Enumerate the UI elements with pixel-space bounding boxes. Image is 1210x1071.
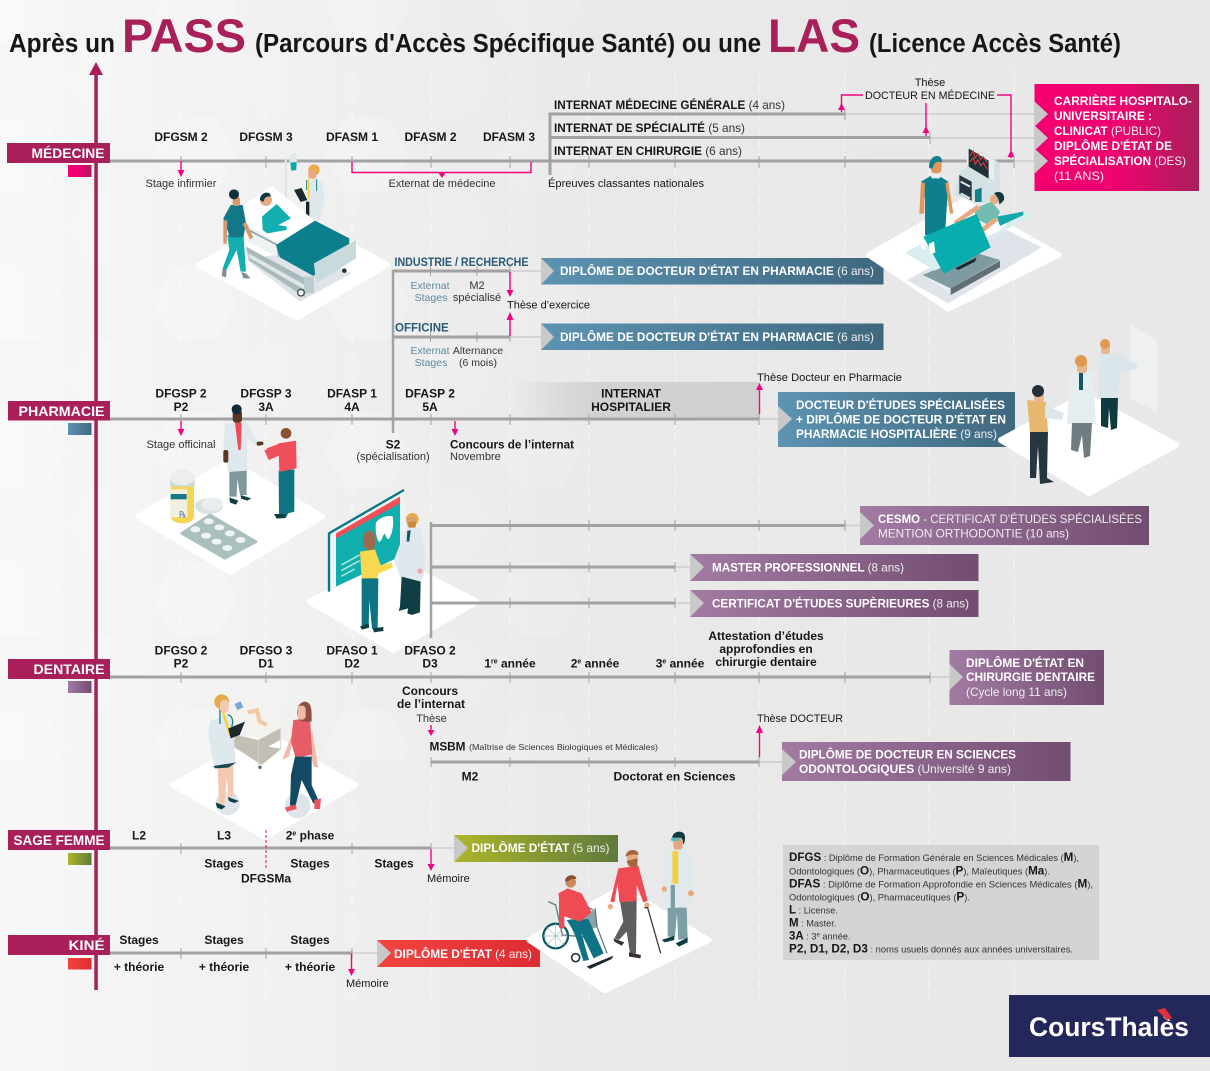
year labels: dentaire [155, 644, 705, 670]
phase labels: phase [296, 828, 335, 842]
diploma: master professionnel [690, 554, 978, 581]
dentaire timeline [110, 520, 951, 767]
msbm: (Maîtrise de Sciences Biologiques et Médicales) [469, 742, 658, 752]
year labels: pharmacie: 3A [258, 400, 274, 414]
diploma: carrière hospitalo-universitaire: CLINICAT (PUBLIC) [1054, 124, 1161, 138]
diploma: pharmacie officine: DIPLÔME DE DOCTEUR D'ÉTAT EN PHARMACIE (6 ans) [560, 329, 874, 344]
glossary panel: Odontologiques (O), Pharmaceutiques (P). [789, 892, 970, 904]
phase labels: e [292, 830, 296, 838]
tag: kiné: KINÉ [68, 937, 104, 953]
year labels: dentaire: e [662, 658, 666, 666]
diploma: docteur en sciences odontologiques: DIPLÔME DE DOCTEUR EN SCIENCES [799, 746, 1016, 762]
diploma: chirurgie dentaire: CHIRURGIE DENTAIRE [966, 670, 1095, 684]
diploma: certificat d'études supérieures: CERTIFICAT D'ÉTUDES SUPÈRIEURES (8 ans) [712, 596, 969, 610]
glossary panel: M : Master. [789, 918, 836, 930]
phase labels [132, 828, 414, 886]
section: sage-femme [8, 828, 618, 886]
year labels: dentaire: DFGSO 3 [240, 644, 293, 658]
stage officinal: Stage officinal [147, 439, 215, 451]
s2 spécialisation [356, 438, 430, 463]
officine branch: (6 mois) [459, 357, 497, 369]
diploma: carrière hospitalo-universitaire: SPÉCIALISATION (DES) [1054, 153, 1186, 168]
stages labels: Stages [290, 933, 330, 947]
stages labels: Stages [119, 933, 159, 947]
industrie / recherche branch: spécialisé [453, 292, 501, 304]
year labels: dentaire: P2 [174, 656, 189, 670]
glossary panel: Odontologiques (O), Pharmaceutiques (P), Maïeutiques (Ma). [789, 866, 1050, 878]
title: Après un [9, 30, 115, 58]
year labels: pharmacie: HOSPITALIER [591, 400, 671, 414]
title: LAS [768, 9, 860, 62]
diploma: pharmacie industrie [541, 258, 884, 284]
industrie / recherche branch: INDUSTRIE / RECHERCHE [394, 257, 529, 269]
mémoire kiné [346, 954, 389, 990]
year labels: dentaire: e [577, 658, 581, 666]
mémoire sage-femme [427, 849, 470, 885]
stages labels [114, 933, 335, 974]
diploma: pharmacie industrie: DIPLÔME DE DOCTEUR D'ÉTAT EN PHARMACIE (6 ans) [560, 263, 874, 278]
section: médecine [7, 77, 1199, 191]
concours de l'internat: Novembre [450, 451, 501, 463]
tag: pharmacie [8, 401, 110, 435]
phase labels: 2 [286, 828, 292, 842]
year labels: pharmacie: DFGSP 2 [155, 386, 207, 400]
diploma: kiné [377, 940, 540, 967]
officine branch [395, 322, 503, 369]
diploma: pharmacie hospitalière: + DIPLÔME DE DOCTEUR D'ÉTAT EN [796, 412, 1006, 426]
concours de l'internat dentaire: Thèse [416, 713, 447, 725]
officine branch: Stages [415, 357, 447, 369]
year labels: dentaire: D2 [344, 656, 360, 670]
year labels: dentaire: année [666, 656, 705, 670]
illustration: midwife [173, 694, 356, 837]
tag: sage femme [8, 830, 110, 865]
diploma: pharmacie hospitalière: DOCTEUR D'ÉTUDES SPÉCIALISÉES [796, 397, 1005, 412]
diploma: carrière hospitalo-universitaire: (11 ANS) [1054, 169, 1104, 183]
title [9, 9, 1121, 62]
attestation [708, 629, 824, 669]
section: kiné [8, 933, 540, 990]
year labels: pharmacie: DFASP 2 [405, 386, 455, 400]
s2 spécialisation: (spécialisation) [356, 451, 430, 463]
year labels: pharmacie: P2 [174, 400, 189, 414]
diploma: carrière hospitalo-universitaire: UNIVERSITAIRE : [1054, 109, 1152, 123]
diploma: certificat d'études supérieures [690, 590, 978, 617]
year labels: médecine: DFASM 1 [326, 130, 378, 144]
glossary panel [783, 845, 1099, 960]
phase labels: DFGSMa [241, 872, 291, 886]
year labels: dentaire: 1 [484, 656, 491, 670]
concours de l'internat dentaire: Concours [402, 684, 458, 698]
year labels: pharmacie [155, 386, 671, 414]
diploma: carrière hospitalo-universitaire: CARRIÈRE HOSPITALO- [1054, 93, 1192, 108]
thèse d'exercice [506, 300, 590, 336]
tag: médecine: MÉDECINE [32, 145, 104, 161]
médecine timeline [110, 109, 1036, 175]
illustration: operating room [869, 143, 1059, 309]
title: (Licence Accès Santé) [869, 30, 1121, 58]
logo: cours thalès [1009, 995, 1210, 1057]
diploma: pharmacie hospitalière: PHARMACIE HOSPITALIÈRE (9 ans) [796, 426, 997, 441]
glossary panel: 3A : 3 [789, 930, 816, 942]
tag: dentaire [8, 659, 110, 693]
phase labels: Stages [290, 856, 330, 870]
kiné timeline [110, 948, 378, 959]
diploma: carrière hospitalo-universitaire [1034, 84, 1199, 191]
stage infirmier [146, 161, 217, 190]
thèse docteur [756, 713, 843, 757]
glossary panel: e [816, 932, 820, 938]
officine branch: Alternance [453, 345, 503, 357]
stage officinal [147, 421, 215, 451]
year labels: pharmacie: DFASP 1 [327, 386, 377, 400]
concours de l'internat dentaire [397, 684, 465, 736]
year labels: dentaire: DFASO 1 [326, 644, 378, 658]
sage-femme timeline [110, 830, 455, 870]
internat labels [554, 97, 785, 158]
internat labels: INTERNAT MÉDECINE GÉNÉRALE (4 ans) [554, 97, 785, 112]
concours de l'internat dentaire: de l’internat [397, 697, 465, 711]
illustration: hospital room [199, 153, 387, 318]
externat de médecine [352, 162, 531, 190]
year labels: dentaire: DFASO 2 [404, 644, 456, 658]
section: pharmacie [8, 257, 1015, 463]
diploma: cesmo: CESMO - CERTIFICAT D'ÉTUDES SPÉCIALISÉES [878, 511, 1142, 526]
year labels: dentaire: 2 [571, 656, 577, 670]
axis arrow [89, 62, 103, 990]
thèse docteur en pharmacie: Thèse Docteur en Pharmacie [757, 372, 902, 384]
glossary panel: DFGS : Diplôme de Formation Générale en Sciences Médicales (M), [789, 852, 1079, 864]
attestation: approfondies en [719, 642, 813, 656]
year labels: dentaire: D1 [258, 656, 274, 670]
msbm [430, 740, 736, 784]
year labels: dentaire: DFGSO 2 [155, 644, 208, 658]
title: PASS [122, 9, 246, 62]
phase labels: L3 [217, 828, 231, 842]
diploma: docteur en sciences odontologiques [782, 742, 1070, 781]
year labels: dentaire: re [491, 658, 498, 666]
mémoire kiné: Mémoire [346, 978, 389, 990]
stages labels: + théorie [114, 960, 164, 974]
glossary panel: L : License. [789, 904, 838, 916]
thèse docteur en médecine: DOCTEUR EN MÉDECINE [865, 89, 995, 102]
concours de l'internat: Concours de l’internat [450, 438, 574, 452]
year labels: pharmacie: 4A [344, 400, 360, 414]
internat labels: INTERNAT EN CHIRURGIE (6 ans) [554, 144, 742, 158]
diploma: master professionnel: MASTER PROFESSIONNEL (8 ans) [712, 560, 904, 574]
year labels: pharmacie: 5A [422, 400, 438, 414]
diploma: sage-femme [454, 835, 618, 862]
thèse docteur en médecine [838, 77, 1014, 158]
thèse docteur en médecine: Thèse [915, 77, 945, 89]
externat de médecine: Externat de médecine [388, 178, 496, 190]
glossary panel: DFAS : Diplôme de Formation Approfondie en Sciences Médicales ( M), [789, 878, 1093, 890]
year labels: médecine: DFGSM 2 [154, 130, 208, 144]
pharmacie timeline [110, 266, 780, 433]
internat hospitalier band [510, 382, 760, 418]
illustration: hospital pharmacy team [1001, 325, 1176, 493]
diploma: cesmo [860, 506, 1149, 545]
phase labels: L2 [132, 828, 146, 842]
s2 spécialisation: S2 [386, 438, 401, 452]
diploma: kiné: DIPLÔME D'ÉTAT (4 ans) [394, 946, 532, 961]
year labels: pharmacie: INTERNAT [601, 386, 662, 400]
diploma: sage-femme: DIPLÔME D'ÉTAT (5 ans) [472, 840, 610, 855]
industrie / recherche branch [394, 257, 529, 304]
tag: médecine [7, 143, 110, 177]
mémoire sage-femme: Mémoire [427, 873, 470, 885]
officine branch: Externat [410, 345, 450, 357]
year labels: médecine: DFGSM 3 [239, 130, 293, 144]
tag: dentaire: DENTAIRE [34, 661, 104, 677]
illustration: physiotherapy [529, 832, 709, 991]
attestation: chirurgie dentaire [715, 655, 817, 669]
section: dentaire [8, 506, 1149, 784]
internat labels: INTERNAT DE SPÉCIALITÉ (5 ans) [554, 120, 745, 135]
year labels: dentaire: 3 [656, 656, 662, 670]
diploma: pharmacie hospitalière [778, 392, 1015, 447]
diploma: cesmo: MENTION ORTHODONTIE (10 ans) [878, 526, 1069, 540]
attestation: Attestation d’études [708, 629, 824, 643]
tag: sage femme: SAGE FEMME [14, 832, 104, 848]
concours de l'internat [450, 421, 574, 463]
logo: cours thalès: CoursThalès [1029, 1012, 1189, 1042]
thèse docteur en pharmacie [756, 372, 902, 414]
tag: pharmacie: PHARMACIE [18, 403, 104, 419]
year labels: médecine: DFASM 3 [483, 130, 535, 144]
title: (Parcours d'Accès Spécifique Santé) ou une [255, 30, 761, 58]
stages labels: Stages [204, 933, 244, 947]
stages labels: + théorie [199, 960, 249, 974]
diploma: chirurgie dentaire: (Cycle long 11 ans) [966, 685, 1067, 699]
msbm: M2 [462, 770, 479, 784]
illustration: pharmacy [138, 404, 322, 572]
year labels: médecine [154, 130, 535, 144]
industrie / recherche branch: M2 [469, 280, 485, 292]
msbm: Doctorat en Sciences [613, 770, 736, 784]
diploma: pharmacie officine [541, 324, 884, 350]
diploma: chirurgie dentaire [950, 650, 1104, 705]
phase labels: Stages [204, 856, 244, 870]
year labels: dentaire: année [581, 656, 620, 670]
year labels: dentaire: D3 [422, 656, 438, 670]
msbm: MSBM [430, 740, 466, 754]
officine branch: OFFICINE [395, 322, 449, 334]
épreuves classantes: Épreuves classantes nationales [548, 177, 704, 190]
stages labels: + théorie [285, 960, 335, 974]
stage infirmier: Stage infirmier [146, 178, 217, 190]
diploma: chirurgie dentaire: DIPLÔME D'ÉTAT EN [966, 655, 1084, 670]
year labels: médecine: DFASM 2 [404, 130, 457, 144]
thèse docteur: Thèse DOCTEUR [757, 713, 843, 725]
industrie / recherche branch: Stages [415, 292, 447, 304]
year labels: dentaire: année [498, 656, 536, 670]
glossary panel: année. [820, 932, 850, 942]
thèse d'exercice: Thèse d’exercice [507, 300, 590, 312]
glossary panel: P2, D1, D2, D3 : noms usuels donnés aux années universitaires. [789, 944, 1073, 956]
illustration: dental consultation [309, 490, 477, 650]
diploma: carrière hospitalo-universitaire: DIPLÔME D'ÉTAT DE [1054, 138, 1172, 153]
industrie / recherche branch: Externat [410, 280, 450, 292]
phase labels: Stages [374, 856, 414, 870]
year labels: pharmacie: DFGSP 3 [240, 386, 292, 400]
illustration: pharmacy: ℞ [179, 509, 187, 519]
tag: kiné [8, 935, 110, 970]
diploma: docteur en sciences odontologiques: ODONTOLOGIQUES (Université 9 ans) [799, 762, 1011, 776]
